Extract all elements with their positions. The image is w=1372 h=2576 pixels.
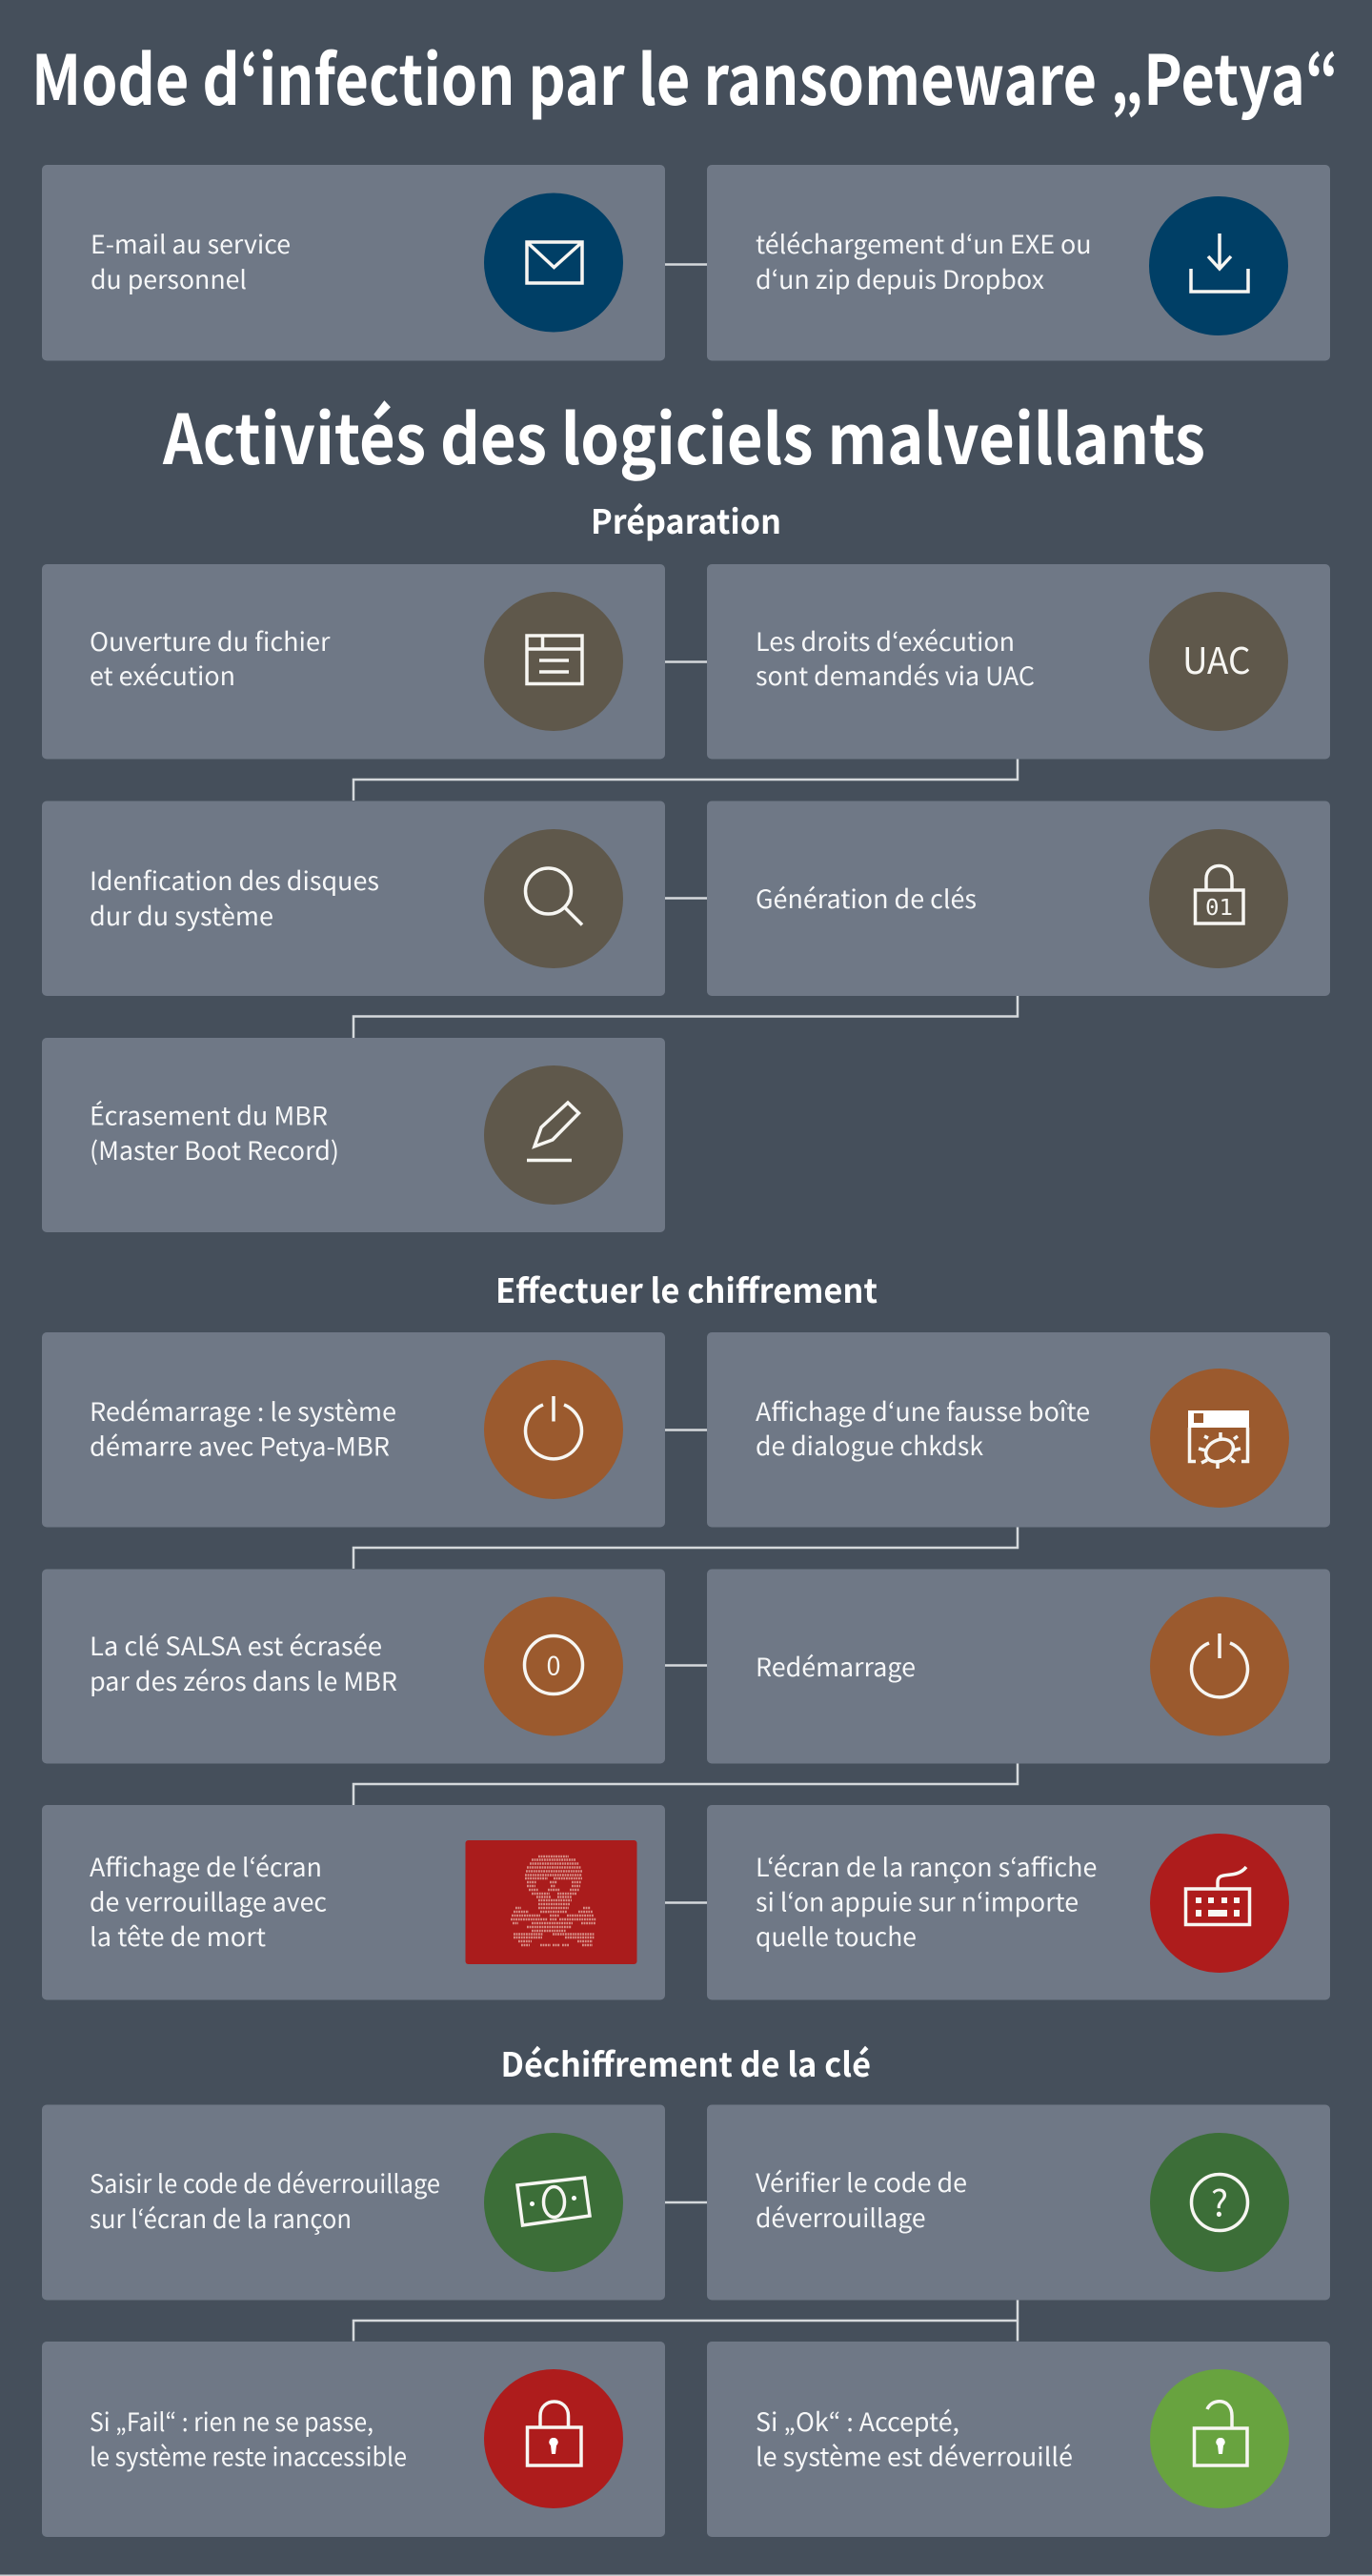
panel: fail	[42, 2342, 665, 2537]
text: lock screen: la tête de mort	[90, 1917, 266, 1954]
text: download: téléchargement d‘un EXE ou	[756, 224, 1092, 261]
icon: question: ?	[1211, 2175, 1228, 2226]
icon: question	[1150, 2133, 1289, 2272]
text: UAC: Les droits d‘exécution	[756, 621, 1015, 659]
text: enter code	[90, 2163, 440, 2236]
text: ok	[756, 2402, 1073, 2474]
text: MBR: Écrasement du MBR	[90, 1096, 328, 1132]
text: disks	[90, 861, 379, 933]
connector branch	[353, 2301, 1018, 2341]
text: verify code: déverrouillage	[756, 2198, 926, 2235]
heading: encryption: Effectuer le chiffrement	[495, 1265, 878, 1313]
text: fail: le système reste inaccessible	[90, 2436, 407, 2474]
connector elbow	[353, 996, 1018, 1038]
connector	[665, 1429, 707, 1431]
icon: download	[1149, 196, 1288, 335]
text: enter code: sur l‘écran de la rançon	[90, 2199, 352, 2236]
text: lock screen	[90, 1847, 327, 1954]
text: restart: Redémarrage	[756, 1647, 916, 1684]
icon: closed lock	[484, 2369, 623, 2508]
text: keys: Génération de clés	[756, 879, 977, 916]
icon: lock 01	[1149, 829, 1288, 968]
connector	[665, 2201, 707, 2203]
text: download: d‘un zip depuis Dropbox	[756, 259, 1044, 296]
text: restart petya: Redémarrage : le système	[90, 1391, 396, 1429]
icon: skull screen	[465, 1840, 636, 1964]
panel: MBR	[42, 1038, 665, 1232]
panel: disks	[42, 801, 665, 996]
heading: preparation: Préparation	[591, 496, 781, 544]
text: lock screen: de verrouillage avec	[90, 1881, 327, 1919]
text: UAC: sont demandés via UAC	[756, 656, 1035, 693]
panel: SALSA	[42, 1569, 665, 1763]
icon: envelope	[484, 193, 623, 332]
text: UAC	[756, 621, 1035, 693]
icon: zero	[484, 1597, 623, 1736]
text: open file: Ouverture du fichier	[90, 621, 331, 659]
text: ransom screen: si l‘on appuie sur n‘importe	[756, 1881, 1079, 1919]
heading: decryption: Déchiffrement de la clé	[501, 2038, 871, 2087]
connector	[665, 897, 707, 900]
panel: chkdsk	[707, 1332, 1330, 1527]
text: download	[756, 224, 1092, 296]
text: MBR	[90, 1096, 339, 1167]
text: verify code	[756, 2162, 967, 2235]
icon: power	[1150, 1597, 1289, 1736]
icon: open lock	[1150, 2369, 1289, 2508]
text: SALSA	[90, 1626, 397, 1698]
connector	[665, 1901, 707, 1904]
text: restart petya	[90, 1391, 396, 1464]
text: e-mail: du personnel	[91, 259, 247, 296]
text: ransom screen: L‘écran de la rançon s‘affiche	[756, 1847, 1097, 1884]
icon: UAC: UAC	[1182, 632, 1250, 684]
panel: verify code	[707, 2104, 1330, 2301]
text: e-mail	[91, 224, 291, 296]
panel: open file	[42, 564, 665, 759]
text: fail	[90, 2402, 407, 2474]
panel: infection download	[707, 165, 1330, 360]
text: SALSA: La clé SALSA est écrasée	[90, 1626, 382, 1663]
text: lock screen: Affichage de l‘écran	[90, 1847, 322, 1884]
panel: infection e-mail	[42, 165, 665, 360]
heading: activities: Activités des logiciels malveillants	[162, 384, 1205, 484]
connector elbow	[353, 1763, 1018, 1805]
icon: pen	[484, 1065, 623, 1205]
text: verify code: Vérifier le code de	[756, 2162, 967, 2200]
connector	[665, 1664, 707, 1667]
panel: enter code	[42, 2104, 665, 2301]
icon: window	[484, 592, 623, 731]
icon: power	[484, 1360, 623, 1499]
icon: UAC	[1149, 592, 1288, 731]
icon: keyboard	[1150, 1834, 1289, 1973]
icon: banknote	[484, 2133, 623, 2272]
text: fail: Si „Fail“ : rien ne se passe,	[90, 2402, 373, 2439]
panel: UAC	[707, 564, 1330, 759]
icon: zero: 0	[547, 1645, 560, 1683]
connector	[665, 263, 707, 266]
text: e-mail: E-mail au service	[91, 224, 291, 261]
panel: keys	[707, 801, 1330, 996]
text: disks: Idenfication des disques	[90, 861, 379, 898]
text: enter code: Saisir le code de déverrouillage	[90, 2163, 440, 2201]
connector elbow	[353, 759, 1018, 801]
text: MBR: (Master Boot Record)	[90, 1130, 339, 1167]
icon: magnifier	[484, 829, 623, 968]
text: restart petya: démarre avec Petya-MBR	[90, 1426, 390, 1464]
text: chkdsk: de dialogue chkdsk	[756, 1426, 983, 1463]
panel: restart petya	[42, 1332, 665, 1527]
text: open file	[90, 621, 331, 693]
panel: ok	[707, 2342, 1330, 2537]
text: disks: dur du système	[90, 896, 273, 933]
text: open file: et exécution	[90, 656, 235, 693]
text: ransom screen	[756, 1847, 1097, 1954]
text: chkdsk: Affichage d‘une fausse boîte	[756, 1391, 1090, 1429]
connector elbow	[353, 1527, 1018, 1569]
panel: ransom screen	[707, 1805, 1330, 1999]
icon: bug window	[1150, 1369, 1289, 1508]
panel: lock screen	[42, 1805, 665, 1999]
icon: lock 01: 01	[1205, 896, 1233, 921]
text: chkdsk	[756, 1391, 1090, 1463]
text: SALSA: par des zéros dans le MBR	[90, 1661, 397, 1698]
connector	[665, 660, 707, 663]
text: ok: Si „Ok“ : Accepté,	[756, 2402, 959, 2439]
text: ok: le système est déverrouillé	[756, 2436, 1073, 2474]
panel: restart	[707, 1569, 1330, 1763]
text: ransom screen: quelle touche	[756, 1917, 917, 1954]
